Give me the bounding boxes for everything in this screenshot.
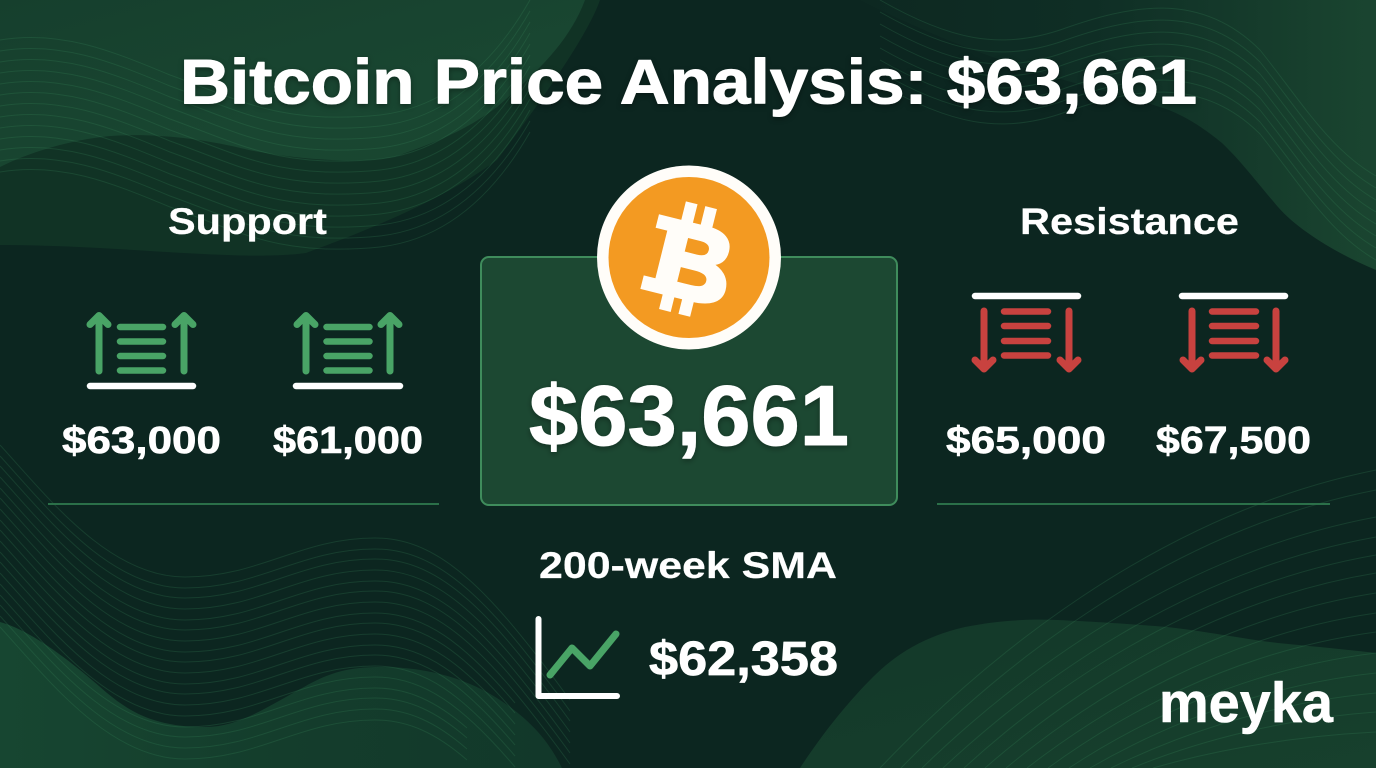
- panel: 200-week SMA: [538, 545, 838, 696]
- icon: bitcoin logo: [597, 166, 781, 350]
- value: 61000: $61,000: [273, 420, 423, 462]
- value: 65000: $65,000: [946, 420, 1106, 462]
- icon: line chart: [538, 619, 617, 696]
- value: SMA: $62,358: [649, 633, 838, 686]
- icon: support level 2: [296, 316, 400, 386]
- panel: resistance: [937, 201, 1330, 505]
- heading: SMA: 200-week SMA: [539, 545, 837, 586]
- value: current price: $63,661: [529, 369, 849, 464]
- panel: current price: [481, 166, 897, 505]
- title: Bitcoin Price Analysis: $63,661: [180, 48, 1197, 118]
- price card: [481, 257, 897, 505]
- value: 63000: $63,000: [62, 420, 221, 462]
- divider: support: [48, 503, 439, 505]
- icon: resistance level 2: [1182, 296, 1285, 369]
- value: 67500: $67,500: [1156, 420, 1311, 462]
- heading: resistance: Resistance: [1020, 201, 1239, 242]
- logo: meyka: meyka: [1159, 671, 1334, 735]
- heading: support: Support: [168, 201, 327, 242]
- divider: resistance: [937, 503, 1330, 505]
- panel: support: [48, 201, 439, 505]
- icon: support level 1: [90, 316, 193, 386]
- icon: resistance level 1: [975, 296, 1078, 369]
